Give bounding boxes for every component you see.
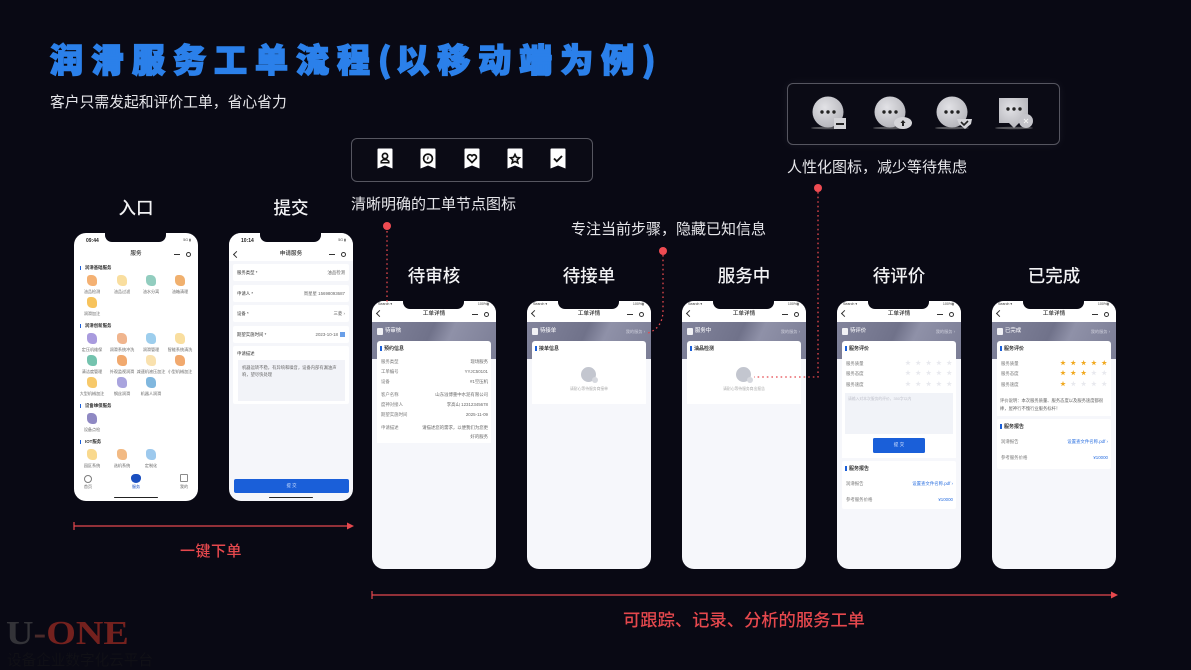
phone: pending acceptance: 待接单 [540,328,556,334]
phone: submit request: 2023-10-18 [316,332,338,337]
phone: pending review: 现场服务 [470,359,488,364]
heading: pending acceptance: 待接单 [563,266,615,286]
phone: service entry: 设备点检 [84,426,100,432]
phone: submit request: 10:14 [241,238,254,244]
arrow: trackable tickets [371,591,1118,599]
phone: submit request: 期望实施时间 * [237,332,266,337]
phone: completed: ¥10000 [1093,455,1108,460]
phone: pending review: Search ▾ [378,302,392,306]
phone: submit request [229,233,353,501]
phone: pending review: 申请描述 [381,425,399,430]
phone: in service: 油品检测 [694,346,714,352]
section: IOT [80,440,101,444]
phone: service entry: 润滑管理 [143,346,159,352]
panel: ticket node icons [351,138,593,182]
section: equipment maintenance [80,404,111,408]
title: 润滑服务工单流程(以移动端为例) [50,34,655,82]
phone: service entry: 智能系统清洗 [168,346,192,352]
comment box [845,393,953,434]
phone: pending rating: ★★★★★ [905,371,957,377]
phone: pending rating: 工单详情 [888,310,910,316]
phone: service entry: 油水分离 [143,288,159,294]
section: basic lubrication: 润滑基础服务 [85,265,111,270]
tab bar: 首页 [84,484,92,489]
phone: service entry: 园区系统 [84,462,100,468]
card: service report [997,419,1111,469]
phone: in service: 100%▮ [788,302,799,306]
phone: pending review: 山东溢博重中水泥有限公司 [435,392,488,397]
phone: in service: Search ▾ [688,302,702,306]
phone: pending acceptance: 我的服务 › [626,329,645,334]
phone: in service: 服务中 [695,328,711,334]
phone: pending acceptance: 100%▮ [633,302,644,306]
phone: pending acceptance [527,301,651,569]
phone: service entry: 小型机械加注 [168,368,192,374]
phone: service entry: 机器人润滑 [141,390,161,396]
empty state [580,367,596,382]
phone: service entry: 外观监视润滑 [110,368,134,374]
phone: service entry: 润滑系统冲洗 [110,346,134,352]
phone: service entry: 定压机维保 [82,346,102,352]
empty state [736,367,750,382]
phone: service entry: 油品过滤 [114,288,130,294]
phone: pending rating: 服务态度 [846,371,864,376]
card: service rating [842,341,956,458]
phone: pending rating [837,301,961,569]
phone: pending review: 100%▮ [478,302,489,306]
phone: completed: 100%▮ [1098,302,1109,306]
icons: ribbons [378,148,566,168]
phone: completed: 服务态度 [1001,371,1019,376]
phone: submit request: 提 交 [286,483,296,488]
heading: in service: 服务中 [718,266,770,286]
phone: pending rating: 参考服务价格 [846,497,872,502]
subtitle: 客户只需发起和评价工单，省心省力 [50,95,287,111]
phone: pending rating: 服务评价 [849,346,869,352]
phone: pending rating: 服务报告 [849,466,869,472]
phone: service entry: 减速机液压加注 [137,368,165,374]
phone: pending review: 度神对接人 [381,402,403,407]
phone: service entry: 服务 [130,251,142,257]
phone: completed: ★★★★★ [1060,382,1112,388]
phone: pending rating: 待评价 [850,328,866,334]
phone: pending review: #1空压机 [470,379,488,384]
phone: pending review: 设备 [381,379,390,384]
phone: pending review: 待审核 [385,328,401,334]
logo: U-ONE watermark: U-ONE [6,615,129,652]
phone: in service [682,301,806,569]
heading: entry: 入口 [118,198,154,218]
phone: pending rating: 提 交 [894,442,904,447]
caption: humanized icons: 人性化图标，减少等待焦虑 [787,159,967,176]
heading: submit: 提交 [274,198,308,218]
phone: pending review: 请描述您的需求，以便我们为您更 [422,425,488,430]
phone: pending rating: 服务质量 [846,361,864,366]
phone: pending rating: 请输入对本次服务的评价，350字以内 [848,397,911,401]
phone: submit request: 周星星 15698093687 [304,291,345,296]
submit button [234,479,349,493]
phone: completed: 设置查文件名称.pdf › [1067,439,1108,444]
phone: pending rating: ★★★★★ [905,361,957,367]
card: service report [842,461,956,509]
phone: submit request: 申请服务 [280,251,302,257]
phone: completed: 我的服务 › [1091,329,1110,334]
phone: submit request: 申请人 * [237,291,253,296]
phone: in service: 我的服务 › [781,329,800,334]
phone: pending acceptance: 接单信息 [539,346,559,352]
phone: completed: 润滑报告 [1001,439,1019,444]
heading: pending rating: 待评价 [873,266,925,286]
tab bar: 我的 [180,484,188,489]
phone: service entry: 定制化 [145,462,157,468]
caption: focus on current step: 专注当前步骤，隐藏已知信息 [571,221,766,238]
phone: service entry: 大型机械加注 [80,390,104,396]
phone: completed: 服务报告 [1004,424,1024,430]
logo: U-ONE watermark: 设备企业数字化云平台 [7,653,153,669]
phone: pending rating: ¥10000 [938,497,953,502]
phone: service entry: 选机系统 [114,462,130,468]
phone: completed: 服务质量 [1001,361,1019,366]
arrow: one-click order [73,522,354,530]
phone: pending acceptance: 请耐心等待服务商接单 [570,387,608,391]
phone: pending review [372,301,496,569]
phone: submit request: 申请描述 [237,351,255,356]
phone: pending rating: 润滑报告 [846,481,864,486]
phone: pending review: 李高山 12312345678 [447,402,488,407]
phone: pending acceptance: 工单详情 [578,310,600,316]
phone: pending rating: 我的服务 › [936,329,955,334]
phone: pending review: 服务类型 [381,359,399,364]
caption: ticket node icons: 清晰明确的工单节点图标 [351,196,516,213]
phone: submit request: 油品检测 [327,270,345,275]
phone: completed: 已完成 [1005,328,1021,334]
phone: completed: ★★★★★ [1060,371,1112,377]
phone: pending acceptance: Search ▾ [533,302,547,306]
phone: completed: 服务评价 [1004,346,1024,352]
section: basic lubrication [80,266,111,270]
phone: completed: 评价说明：本次服务质量、服务态度以及服务速度都很棒，屋神行不愧行业服务标杆！ [1000,398,1103,411]
phone: completed: Search ▾ [998,302,1012,306]
phone: completed: 参考服务价格 [1001,455,1027,460]
form rows [233,264,349,281]
card: acceptance info [532,341,646,404]
label: one-click order: 一键下单 [180,543,242,560]
phone: completed: ★★★★★ [1060,361,1112,367]
phone: service entry: 09:44 [86,238,99,244]
phone: pending review: 期望实施时间 [381,412,407,417]
phone: pending review: 预约信息 [384,346,404,352]
phone: completed: 工单详情 [1043,310,1065,316]
phone: pending review: 客户名称 [381,392,399,397]
phone: pending review: 工单详情 [423,310,445,316]
phone: completed [992,301,1116,569]
phone: submit request: 设备 * [237,311,249,316]
card: oil check [687,341,801,404]
phone: in service: 请耐心等待服务商出报告 [723,387,765,391]
icons: waiting bubbles [811,96,1033,130]
phone: service entry: 5G ▮ [183,238,191,242]
section: innovative lubrication: 润滑创新服务 [85,323,111,328]
phone: service entry [74,233,198,501]
phone: pending rating: 服务速度 [846,382,864,387]
section: IOT: IOT服务 [85,439,101,444]
phone: pending review: 工单编号 [381,369,399,374]
phone: service entry: 油品检测 [84,288,100,294]
phone: submit request: 三菱 › [334,311,345,316]
phone: submit request: 5G ▮ [338,238,346,242]
phone: in service: 工单详情 [733,310,755,316]
label: trackable tickets: 可跟踪、记录、分析的服务工单 [623,610,865,630]
phone: service entry: 钢丝润滑 [114,390,130,396]
section: innovative lubrication [80,324,111,328]
phone: pending review: YYJC50101 [465,369,488,374]
phone: completed: 服务速度 [1001,382,1019,387]
phone: pending review: 好的服务 [470,434,488,439]
tab bar [84,474,188,498]
phone: pending rating: 100%▮ [943,302,954,306]
heading: completed: 已完成 [1028,266,1080,286]
section: equipment maintenance: 设备维保服务 [85,403,111,408]
phone: pending rating: 设置查文件名称.pdf › [912,481,953,486]
phone: pending rating: Search ▾ [843,302,857,306]
phone: submit request: 机器运转不稳，有异响和噪音，设备内部有漏油声响，望尽快处理 [242,365,337,376]
panel: humanized icons [787,83,1060,145]
phone: pending rating: ★★★★★ [905,382,957,388]
tab bar: 服务 [132,484,140,489]
phone: service entry: 润滑加注 [84,310,100,316]
card: booking info [377,341,491,443]
card: service rating [997,341,1111,416]
phone: service entry: 清洁度管理 [82,368,102,374]
logo: U-ONE watermark [6,615,153,669]
phone: pending review: 2025-11-09 [466,412,488,417]
phone: submit request: 服务类型 * [237,270,258,275]
phone: service entry: 油箱清理 [172,288,188,294]
submit button [873,438,925,453]
heading: pending review: 待审核 [408,266,460,286]
